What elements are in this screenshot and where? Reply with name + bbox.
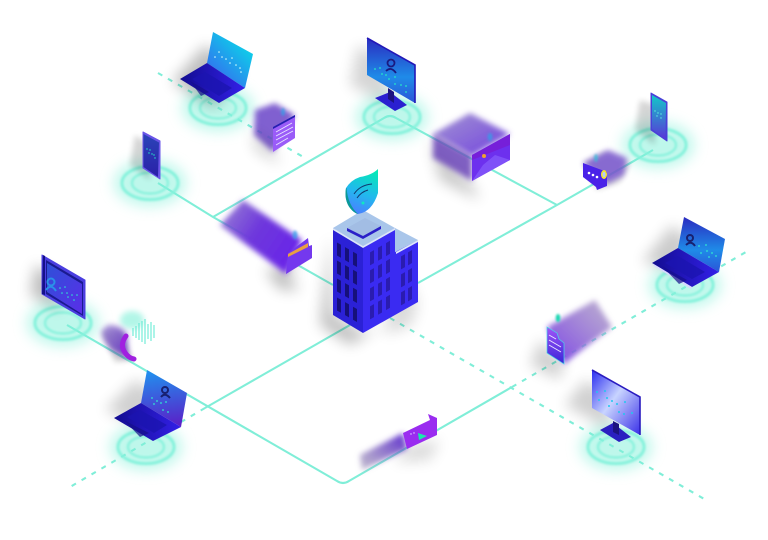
icon: storage box (430, 113, 510, 200)
signal rings: lower monitor (580, 424, 652, 470)
icon: video camera with motion trail (360, 414, 440, 470)
icon: document with motion trail (530, 300, 612, 380)
signal rings: top monitor (356, 94, 428, 140)
icon: handset with sound wave (102, 311, 154, 362)
icon: lower monitor (565, 370, 640, 442)
icon: lower-left laptop (105, 370, 187, 441)
icon: security shield (346, 169, 378, 214)
building windows: left face (337, 242, 357, 322)
connection lines (67, 73, 746, 500)
signal rings: tablet (27, 300, 99, 346)
icon: document box (252, 103, 295, 165)
icon: top monitor (350, 38, 415, 111)
signal rings: right laptop (649, 262, 721, 308)
signal rings: right phone (622, 122, 694, 168)
building windows: right face (370, 228, 412, 323)
icon: right phone (635, 93, 667, 145)
icon: right laptop (642, 217, 725, 289)
icon: router (583, 150, 630, 190)
icon: folder with motion trail (220, 200, 312, 290)
signal rings: left phone (114, 160, 186, 206)
icon: left phone (130, 132, 160, 180)
icon: top laptop (172, 32, 253, 108)
icon: tablet (30, 255, 85, 319)
signal rings: top laptop (182, 85, 254, 131)
signal rings: lower-left laptop (110, 424, 182, 470)
icon: central building (320, 210, 418, 345)
